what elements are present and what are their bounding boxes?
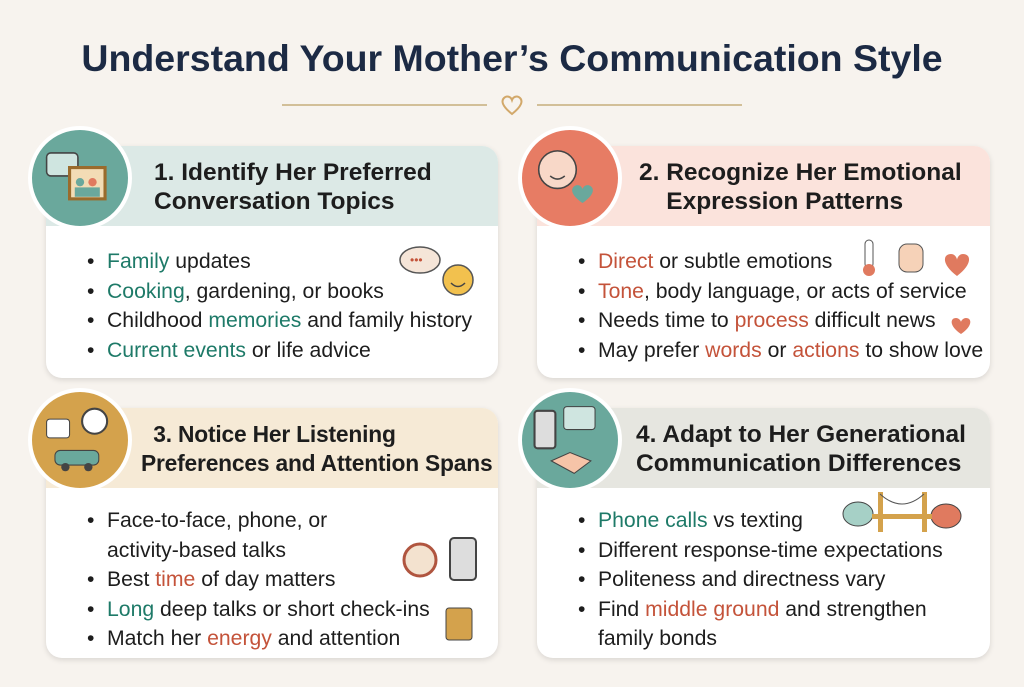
icon: clock phone mug (402, 537, 477, 640)
bullet list 4: family bonds (598, 627, 717, 650)
bullet list 3 (88, 509, 430, 650)
heading 2 (639, 159, 962, 215)
bullet list 1: Current events or life advice (107, 338, 371, 362)
heading 3 (141, 421, 492, 476)
bullet list 3: Face-to-face, phone, or (107, 509, 327, 532)
bullet list 2: May prefer words or actions to show love (598, 338, 983, 362)
bullet list 1: Childhood memories and family history (107, 309, 472, 332)
bullet list 1: Family updates (107, 250, 251, 273)
icon: thermometer hand heart (863, 240, 970, 334)
bullet list 3: Long deep talks or short check-ins (107, 598, 430, 620)
bullet list 4: Phone calls vs texting (598, 509, 803, 532)
bullet list 3: Best time of day matters (107, 568, 335, 591)
bullet list 4: Find middle ground and strengthen (598, 598, 927, 620)
heading 1: 1. Identify Her Preferred (154, 159, 432, 186)
heading 1: Conversation Topics (154, 188, 395, 215)
bullet list 4: Different response-time expectations (598, 538, 943, 562)
icon: phone chat handshake (518, 388, 622, 492)
bullet list 2: Direct or subtle emotions (598, 250, 832, 273)
bullet list 1 (88, 250, 472, 362)
bullet list 4 (578, 509, 943, 650)
icon: bridge between bubbles (842, 492, 962, 532)
heading 4 (636, 421, 966, 477)
bullet list 1: Cooking, gardening, or books (107, 280, 384, 302)
heading 3: Preferences and Attention Spans (141, 450, 492, 476)
heading 2: Expression Patterns (666, 188, 903, 215)
bullet list 4: Politeness and directness vary (598, 568, 885, 591)
icon: face and heart (518, 126, 622, 230)
heading 4: 4. Adapt to Her Generational (636, 421, 966, 448)
bullet list 3: Match her energy and attention (107, 627, 400, 650)
title: Understand Your Mother’s Communication Style (81, 37, 943, 79)
icon: chat and family frame (28, 126, 132, 230)
icon: cup clock car (28, 388, 132, 492)
bullet list 2: Tone, body language, or acts of service (598, 280, 967, 302)
panel 1: conversation topics (46, 146, 498, 378)
icon: speech bubble and smiley: ••• (410, 253, 423, 267)
divider with heart (282, 96, 742, 116)
heading 3: 3. Notice Her Listening (153, 421, 396, 447)
heading 1 (154, 159, 432, 215)
heading 4: Communication Differences (636, 450, 961, 477)
bullet list 2: Needs time to process difficult news (598, 309, 936, 332)
panel 4: generational differences (537, 408, 990, 658)
heading 2: 2. Recognize Her Emotional (639, 159, 962, 186)
panel 2: emotional expression (537, 146, 990, 378)
icon: speech bubble and smiley (399, 246, 474, 296)
bullet list 2 (578, 250, 983, 362)
bullet list 3: activity-based talks (107, 538, 286, 562)
panel 3: listening preferences (46, 408, 498, 658)
